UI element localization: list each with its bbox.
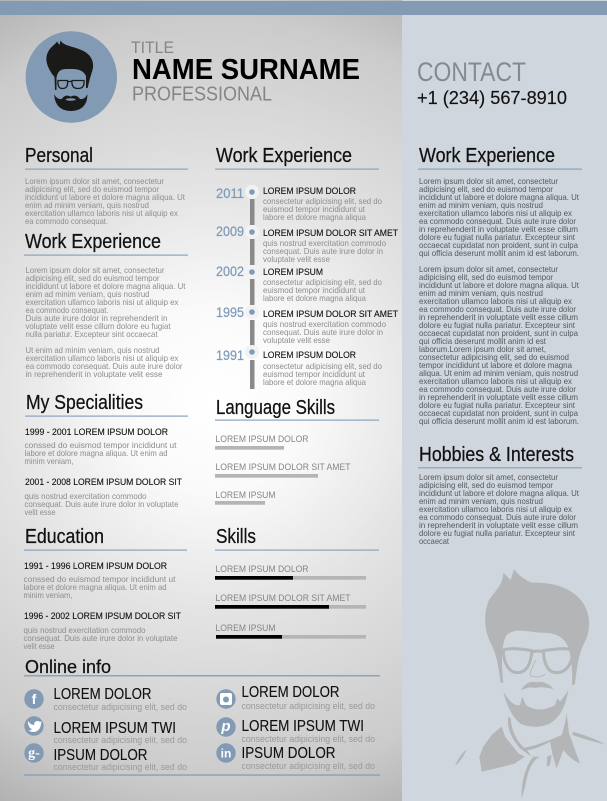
timeline entry 1991: labore et dolore magna aliqua — [263, 377, 366, 387]
timeline entry 1991: 1991 — [216, 348, 244, 363]
work experience text: nulla pariatur. Excepteur sint occaecat — [26, 329, 158, 339]
right text paragraph 2: dolore eu fugiat nulla pariatur. Excepteur sint — [419, 400, 576, 410]
linkedin entry: consectetur adipicising elit, sed do — [242, 761, 375, 771]
heading: language skills: Language Skills — [216, 397, 335, 419]
education entry 1: minim veniam, — [24, 590, 72, 600]
right text paragraph 2: qui officia deserunt mollit anim id est — [419, 336, 547, 346]
skill bar 1: LOREM IPSUM DOLOR — [216, 563, 309, 574]
google plus entry: g- — [28, 746, 40, 761]
timeline entry 2002: euismod tempor incididunt ut — [263, 285, 366, 295]
right panel background — [402, 0, 607, 801]
timeline entry 2009: 2009 — [216, 224, 244, 239]
personal text: incididunt ut labore et dolore magna aliqua. Ut — [25, 192, 186, 202]
heading: my specialities: My Specialities — [26, 392, 143, 414]
right text paragraph 1: occaecat cupidatat non proident, sunt in culpa — [419, 240, 578, 250]
panel: education — [24, 526, 187, 651]
education entry 2 — [24, 610, 181, 651]
heading: online info: Online info — [25, 657, 111, 677]
speciality 2 — [24, 476, 182, 517]
illustration: bearded man portrait — [455, 569, 605, 798]
education entry 2: quis nostrud exercitation commodo — [24, 625, 146, 635]
speciality 2: velit esse — [24, 507, 56, 517]
hobbies text: incididunt ut labore et dolore magna aliqua. Ut — [419, 488, 580, 498]
skill bar 2 — [215, 592, 366, 609]
language bar 3 — [215, 489, 276, 505]
speciality 2: 2001 - 2008 LOREM IPSUM DOLOR SIT — [25, 476, 182, 487]
hobbies text: exercitation ullamco laboris nisi ut aliquip ex — [419, 504, 573, 514]
work experience text: Lorem ipsum dolor sit amet, consectetur — [26, 265, 165, 275]
pinterest entry: p — [220, 718, 231, 735]
header: name block — [26, 31, 360, 123]
language bar 3: LOREM IPSUM — [216, 489, 276, 500]
speciality 1: labore et dolore magna aliqua. Ut enim ad — [24, 448, 168, 458]
right text paragraph 1: qui officia deserunt mollit anim id est laborum. — [419, 248, 579, 258]
right text paragraph 2: in reprehenderit in voluptate velit esse cillum — [419, 392, 578, 402]
education entry 1: labore et dolore magna aliqua. Ut enim ad — [24, 582, 167, 592]
heading: timeline work experience: Work Experience — [216, 145, 352, 167]
google plus entry — [24, 743, 187, 772]
work experience text: in reprehenderit in voluptate velit esse — [26, 369, 163, 379]
timeline entry 1991 — [216, 345, 382, 389]
linkedin entry: in — [221, 746, 231, 760]
heading: right work experience: Work Experience — [419, 145, 555, 167]
timeline entry 2002: consectetur adipicising elit, sed do — [263, 277, 382, 287]
right text paragraph 2: laborum.Lorem ipsum dolor sit amet, — [419, 344, 546, 354]
education entry 1: 1991 - 1996 LOREM IPSUM DOLOR — [24, 560, 167, 571]
speciality 2: quis nostrud exercitation commodo — [24, 491, 147, 501]
timeline entry 2009 — [216, 224, 398, 265]
right text paragraph 2: adipicising elit, sed do euismod tempor — [419, 272, 553, 282]
hobbies text: enim ad minim veniam, quis nostrud — [419, 496, 543, 506]
pinterest entry — [216, 717, 375, 744]
right text paragraph 2: dolore eu fugiat nulla pariatur. Excepteur sint — [419, 320, 576, 330]
right text paragraph 2: qui officia deserunt mollit anim id est laborum. — [419, 416, 579, 426]
panel: hobbies and interests — [418, 444, 582, 546]
timeline entry 2011 — [216, 185, 382, 225]
panel: skills — [215, 526, 379, 639]
speciality 1: conssed do euismod tempor incididunt ut — [24, 440, 177, 450]
right text paragraph 2: aliqua. Ut enim ad minim veniam, quis nostrud — [419, 368, 578, 378]
right text paragraph 2: incididunt ut labore et dolore magna aliqua. Ut — [419, 280, 580, 290]
hobbies text: adipicising elit, sed do euismod tempor — [419, 480, 553, 490]
right text paragraph 1: incididunt ut labore et dolore magna aliqua. Ut — [419, 192, 580, 202]
timeline entry 2011: euismod tempor incididunt ut — [263, 204, 366, 214]
education entry 2: consequat. Duis aute irure dolor in voluptate — [24, 633, 178, 643]
panel: my specialities — [24, 392, 188, 517]
right text paragraph 1 — [419, 176, 580, 258]
work experience text: exercitation ullamco laboris nisi ut aliquip ex — [26, 353, 179, 363]
twitter entry: LOREM IPSUM TWI — [54, 720, 176, 737]
right text paragraph 2: Lorem ipsum dolor sit amet, consectetur — [419, 264, 558, 274]
work experience text — [26, 265, 186, 379]
timeline entry 2011: LOREM IPSUM DOLOR — [263, 185, 356, 196]
heading: education: Education — [25, 526, 104, 548]
education entry 2: velit esse — [24, 641, 55, 651]
panel: language skills — [215, 397, 379, 505]
timeline entry 2009: quis nostrud exercitation commodo — [263, 238, 386, 248]
skill bar 2: LOREM IPSUM DOLOR SIT AMET — [216, 592, 351, 603]
personal text: Lorem ipsum dolor sit amet, consectetur — [25, 176, 164, 186]
work experience text: voluptate velit esse cillum dolore eu fugiat — [26, 321, 171, 331]
right text paragraph 2: consectetur adipicising elit, sed do euismod — [419, 352, 569, 362]
work experience text: ea commodo consequat. — [26, 305, 108, 315]
speciality 2: consequat. Duis aute irure dolor in voluptate — [24, 499, 179, 509]
timeline entry 2009: LOREM IPSUM DOLOR SIT AMET — [263, 227, 398, 238]
right text paragraph 1: adipicising elit, sed do euismod tempor — [419, 184, 553, 194]
language bar 2: LOREM IPSUM DOLOR SIT AMET — [216, 461, 351, 472]
right text paragraph 1: in reprehenderit in voluptate velit esse cillum — [419, 224, 578, 234]
panel: work experience left — [24, 231, 188, 379]
skill bar 1 — [215, 563, 366, 580]
hobbies text — [419, 472, 580, 546]
right text paragraph 2: occaecat cupidatat non proident, sunt in culpa — [419, 408, 578, 418]
timeline entry 2011: 2011 — [216, 186, 244, 201]
timeline entry 1995 — [216, 305, 398, 346]
right text paragraph 1: enim ad minim veniam, quis nostrud — [419, 200, 543, 210]
language bar 1: LOREM IPSUM DOLOR — [216, 433, 309, 444]
education entry 2: 1996 - 2002 LOREM IPSUM DOLOR SIT — [24, 610, 181, 621]
facebook entry — [24, 686, 187, 712]
hobbies text: dolore eu fugiat nulla pariatur. Excepteur sint — [419, 528, 576, 538]
personal text: exercitation ullamco laboris nisi ut aliquip ex — [25, 208, 179, 218]
right text paragraph 2: exercitation ullamco laboris nisi ut aliquip ex — [419, 296, 573, 306]
timeline entry 2011: consectetur adipicising elit, sed do — [263, 196, 382, 206]
speciality 1: 1999 - 2001 LOREM IPSUM DOLOR — [25, 426, 168, 437]
education entry 1: conssed do euismod tempor incididunt ut — [24, 574, 176, 584]
hobbies text: occaecat — [419, 536, 450, 546]
personal text: ea commodo consequat. — [25, 216, 108, 226]
timeline entry 2009: voluptate velit esse — [263, 254, 330, 264]
language bar 1 — [215, 433, 309, 450]
right text paragraph 1: exercitation ullamco laboris nisi ut aliquip ex — [419, 208, 573, 218]
work experience text: adipicising elit, sed do euismod tempor — [26, 273, 160, 283]
top bar — [0, 1, 607, 15]
right text paragraph 2: tempor incididunt ut labore et dolore magna — [419, 360, 572, 370]
speciality 1 — [24, 426, 177, 466]
timeline entry 2011: labore et dolore magna aliqua — [263, 212, 366, 222]
facebook entry: LOREM DOLOR — [54, 686, 152, 703]
personal text — [25, 176, 186, 226]
skill bar 3 — [216, 622, 366, 639]
right text paragraph 2: exercitation ullamco laboris nisi ut aliquip ex — [419, 376, 573, 386]
timeline entry 1991: consectetur adipicising elit, sed do — [263, 361, 382, 371]
pinterest entry: LOREM IPSUM TWI — [242, 718, 364, 735]
work experience text: ea commodo consequat. Duis aute irure dolor — [26, 361, 183, 371]
contact block — [417, 57, 567, 108]
contact heading: CONTACT — [417, 57, 526, 87]
right text paragraph 2: ea commodo consequat. Duis aute irure dolor — [419, 384, 576, 394]
phone number: +1 (234) 567-8910 — [417, 87, 567, 108]
panel: online info — [24, 657, 380, 776]
hobbies text: in reprehenderit in voluptate velit esse cillum — [419, 520, 578, 530]
timeline entry 2002 — [216, 264, 382, 305]
heading: hobbies and interests: Hobbies & Interests — [419, 444, 574, 466]
panel: work experience right — [418, 145, 582, 426]
timeline entry 2009: consequat. Duis aute irure dolor in — [263, 246, 383, 256]
timeline entry 2002: 2002 — [216, 264, 244, 279]
google plus entry: consectetur adipicising elit, sed do — [54, 762, 187, 772]
right text paragraph 2: in reprehenderit in voluptate velit esse cillum — [419, 312, 578, 322]
instagram entry: consectetur adipicising elit, sed do — [242, 701, 375, 711]
google plus entry: IPSUM DOLOR — [54, 747, 148, 764]
work experience text: incididunt ut labore et dolore magna aliqua. Ut — [26, 281, 186, 291]
timeline entry 1995: voluptate velit esse — [263, 335, 330, 345]
facebook entry: f — [32, 691, 37, 707]
right text paragraph 2: occaecat cupidatat non proident, sunt in culpa — [419, 328, 578, 338]
right text paragraph 2: ea commodo consequat. Duis aute irure dolor — [419, 304, 576, 314]
instagram entry — [216, 684, 375, 711]
timeline entry 1995: 1995 — [216, 305, 244, 320]
work experience text: exercitation ullamco laboris nisi ut aliquip ex — [26, 297, 179, 307]
panel: work experience timeline — [215, 145, 398, 389]
heading: work experience: Work Experience — [25, 231, 161, 253]
timeline entry 2002: labore et dolore magna aliqua — [263, 293, 366, 303]
timeline entry 2002: LOREM IPSUM — [263, 266, 323, 277]
right text paragraph 1: dolore eu fugiat nulla pariatur. Excepteur sint — [419, 232, 576, 242]
panel: personal — [25, 145, 188, 226]
linkedin entry — [216, 743, 375, 771]
linkedin entry: IPSUM DOLOR — [242, 745, 336, 762]
left panel background — [0, 0, 403, 801]
name: NAME SURNAME — [132, 54, 360, 86]
timeline entry 1995: quis nostrud exercitation commodo — [263, 319, 386, 329]
facebook entry: consectetur adipicising elit, sed do — [54, 702, 187, 712]
hobbies text: ea commodo consequat. Duis aute irure dolor — [419, 512, 576, 522]
avatar badge — [26, 31, 117, 123]
personal text: adipicising elit, sed do euismod tempor — [25, 184, 159, 194]
skill bar 3: LOREM IPSUM — [216, 622, 276, 633]
profession: PROFESSIONAL — [132, 84, 272, 106]
right text paragraph 1: ea commodo consequat. Duis aute irure dolor — [419, 216, 576, 226]
instagram entry: LOREM DOLOR — [242, 684, 340, 701]
title label: TITLE — [131, 38, 174, 57]
education entry 1 — [24, 560, 176, 600]
timeline entry 1995: consequat. Duis aute irure dolor in — [263, 327, 383, 337]
work experience text: Ut enim ad minim veniam, quis nostrud — [26, 345, 160, 355]
timeline entry 1991: LOREM IPSUM DOLOR — [263, 349, 356, 360]
heading: skills: Skills — [216, 526, 256, 548]
timeline entry 1991: euismod tempor incididunt ut — [263, 369, 366, 379]
work experience text: enim ad minim veniam, quis nostrud — [26, 289, 150, 299]
hobbies text: Lorem ipsum dolor sit amet, consectetur — [419, 472, 558, 482]
language bar 2 — [215, 461, 351, 478]
twitter entry: consectetur adipicising elit, sed do — [54, 735, 187, 745]
personal text: enim ad minim veniam, quis nostrud — [25, 200, 149, 210]
heading: personal: Personal — [25, 145, 93, 167]
speciality 1: minim veniam, — [24, 456, 74, 466]
work experience text: Duis aute irure dolor in reprehenderit in — [26, 313, 168, 323]
pinterest entry: consectetur adipicising elit, sed do — [242, 734, 375, 744]
right text paragraph 1: Lorem ipsum dolor sit amet, consectetur — [419, 176, 558, 186]
right text paragraph 2: enim ad minim veniam, quis nostrud — [419, 288, 543, 298]
twitter entry — [24, 716, 187, 745]
right text paragraph 2 — [419, 264, 580, 426]
timeline entry 1995: LOREM IPSUM DOLOR SIT AMET — [263, 308, 398, 319]
